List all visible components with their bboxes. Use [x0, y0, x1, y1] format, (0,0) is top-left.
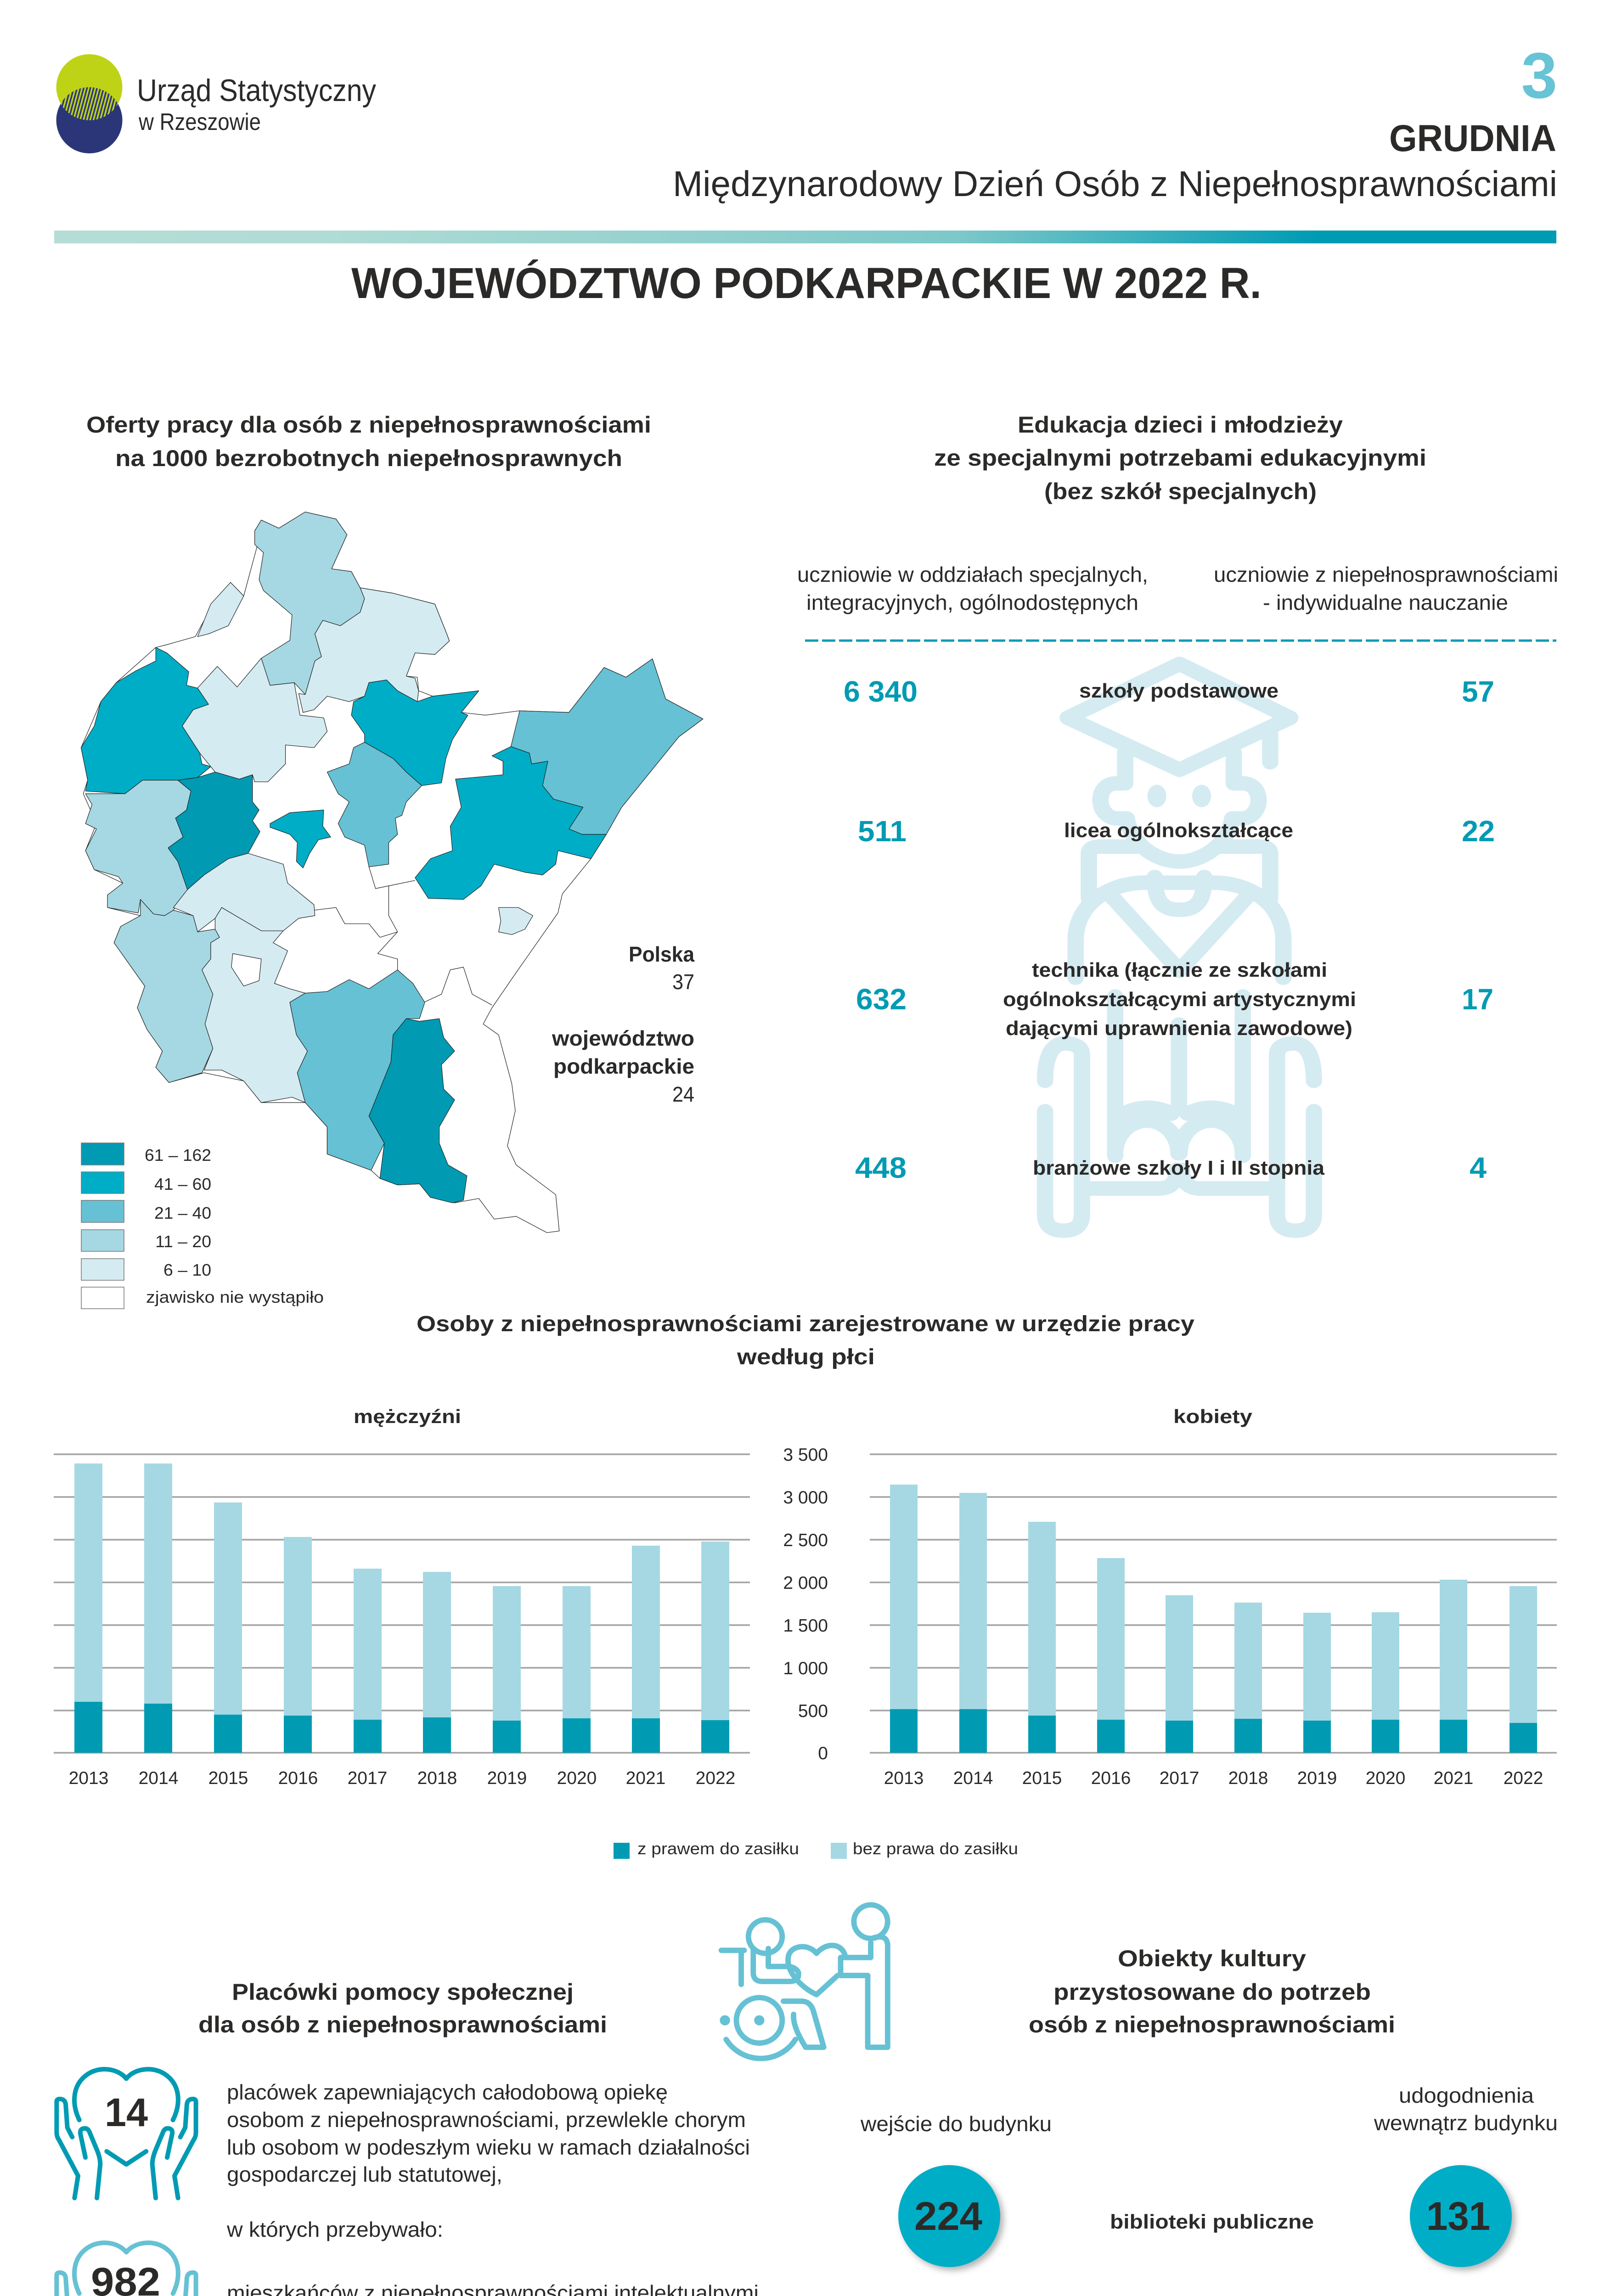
row: biblioteki	[898, 2165, 1512, 2267]
bar chart: men: 2016	[278, 1768, 318, 1788]
column headers: integracyjnych, ogólnodostępnych	[806, 591, 1138, 614]
heading: social care	[198, 1979, 607, 2037]
shared value axis: 2 000	[783, 1573, 828, 1593]
panel: education	[797, 412, 1558, 1231]
chart legend	[614, 1839, 1018, 1859]
row: biblioteki: biblioteki publiczne	[1110, 2211, 1314, 2233]
bar chart: women: 2017	[1160, 1768, 1199, 1788]
bar chart: men: 2021	[626, 1768, 665, 1788]
bar chart: women	[870, 1454, 1557, 1788]
bar chart: men: 2022	[696, 1768, 735, 1788]
panel: cultural facilities	[860, 1946, 1558, 2296]
row: technika	[856, 959, 1493, 1040]
row: licea: licea ogólnokształcące	[1064, 819, 1293, 842]
bar chart: women: 2019	[1297, 1768, 1337, 1788]
row: licea	[858, 815, 1495, 848]
bar chart: men: 2020	[557, 1768, 597, 1788]
icon: hands and heart 14	[56, 2069, 196, 2198]
map legend: 61 – 162	[145, 1146, 211, 1165]
bar chart: women: 2015	[1022, 1768, 1062, 1788]
panel: social care	[56, 1979, 759, 2296]
bar chart: men: 2013	[69, 1768, 108, 1788]
row: technika: dającymi uprawnienia zawodowe)	[1006, 1017, 1352, 1040]
text: facilities: osobom z niepełnosprawnościami, przewlekle chorym	[227, 2108, 746, 2132]
heading: charts: Osoby z niepełnosprawnościami zarejestrowane w urzędzie pracy	[417, 1312, 1194, 1336]
logo: Urząd Statystyczny w Rzeszowie: w Rzeszowie	[138, 109, 261, 135]
logo: Urząd Statystyczny w Rzeszowie: Urząd Statystyczny	[137, 73, 376, 108]
gradient bar	[54, 231, 1556, 243]
map legend: 41 – 60	[154, 1175, 211, 1193]
icon: graduate in wheelchair	[1045, 664, 1314, 1231]
comparison values: Polska	[629, 942, 694, 966]
map legend	[81, 1143, 324, 1309]
comparison values	[552, 942, 694, 1106]
comparison values: podkarpackie	[553, 1054, 694, 1078]
row: szkoły podstawowe: szkoły podstawowe	[1079, 680, 1279, 702]
heading: culture	[1029, 1946, 1395, 2037]
column header: inside: udogodnienia	[1399, 2083, 1534, 2107]
bar chart: women: 2022	[1504, 1768, 1543, 1788]
row: szkoły podstawowe: 57	[1462, 675, 1494, 708]
row: branżowe	[855, 1151, 1487, 1184]
heading: social care: Placówki pomocy społecznej	[232, 1979, 574, 2005]
occasion title: Międzynarodowy Dzień Osób z Niepełnosprawnościami	[673, 163, 1557, 204]
row: szkoły podstawowe	[844, 675, 1494, 708]
logo: Urząd Statystyczny w Rzeszowie	[56, 54, 376, 153]
heading: job offers	[86, 412, 651, 471]
map legend: zjawisko nie wystąpiło	[146, 1288, 324, 1306]
row: licea: 511	[858, 815, 907, 848]
chart legend: bez prawa do zasiłku	[853, 1839, 1018, 1858]
chart title: men: mężczyźni	[354, 1406, 461, 1427]
shared value axis: 3 000	[783, 1488, 828, 1508]
column header: inside: wewnątrz budynku	[1374, 2111, 1558, 2135]
row: biblioteki: 224	[914, 2194, 982, 2239]
bar chart: women: 2016	[1091, 1768, 1131, 1788]
heading: charts	[417, 1312, 1194, 1369]
bar chart: women: 2021	[1434, 1768, 1473, 1788]
column headers	[797, 563, 1558, 614]
row: branżowe: 448	[855, 1151, 907, 1184]
bar chart: men	[54, 1454, 750, 1788]
heading: education: Edukacja dzieci i młodzieży	[1018, 412, 1343, 438]
heading: culture: osób z niepełnosprawnościami	[1029, 2012, 1395, 2037]
row: technika: ogólnokształcącymi artystycznymi	[1003, 988, 1356, 1011]
shared value axis	[783, 1445, 828, 1763]
bar chart: women: 2014	[953, 1768, 993, 1788]
row: technika: technika (łącznie ze szkołami	[1032, 959, 1327, 981]
map legend: 6 – 10	[163, 1261, 211, 1279]
bar chart: women: 2013	[884, 1768, 924, 1788]
column headers: uczniowie z niepełnosprawnościami	[1214, 563, 1558, 586]
date month: GRUDNIA	[1389, 118, 1556, 159]
heading: social care: dla osób z niepełnosprawnościami	[198, 2012, 607, 2037]
column header: inside	[1374, 2083, 1558, 2135]
header	[56, 39, 1557, 204]
text: facilities: gospodarczej lub statutowej,	[227, 2162, 502, 2186]
column header: entrance: wejście do budynku	[860, 2112, 1052, 2136]
main title: WOJEWÓDZTWO PODKARPACKIE W 2022 R.	[351, 259, 1262, 308]
row: branżowe: 4	[1470, 1151, 1487, 1184]
heading: culture: Obiekty kultury	[1118, 1946, 1306, 1971]
heading: education: ze specjalnymi potrzebami edukacyjnymi	[934, 445, 1426, 471]
bar chart: men: 2018	[417, 1768, 457, 1788]
text: facilities	[226, 2080, 750, 2241]
map legend: 21 – 40	[154, 1204, 211, 1222]
row: branżowe: branżowe szkoły I i II stopnia	[1033, 1157, 1325, 1179]
comparison values: 37	[672, 970, 694, 994]
map legend: 11 – 20	[155, 1232, 211, 1251]
shared value axis: 500	[798, 1701, 828, 1721]
comparison values: województwo	[552, 1026, 694, 1050]
shared value axis: 1 500	[783, 1616, 828, 1636]
heading: education: (bez szkół specjalnych)	[1044, 478, 1317, 504]
bar chart: men: 2015	[208, 1768, 248, 1788]
text: facilities: lub osobom w podeszłym wieku w ramach działalności	[227, 2135, 750, 2159]
shared value axis: 0	[818, 1744, 828, 1763]
row: szkoły podstawowe: 6 340	[844, 675, 918, 708]
icon: hands and heart 14: 14	[105, 2090, 148, 2135]
column headers: uczniowie w oddziałach specjalnych,	[797, 563, 1148, 586]
bar chart: men: 2017	[348, 1768, 387, 1788]
row: technika: 632	[856, 983, 907, 1016]
chart legend: z prawem do zasiłku	[637, 1839, 799, 1858]
heading: charts: według płci	[737, 1345, 875, 1369]
heading: job offers: Oferty pracy dla osób z niepełnosprawnościami	[86, 412, 651, 438]
bar chart: men: 2014	[139, 1768, 178, 1788]
text: facilities: w których przebywało:	[226, 2217, 443, 2241]
shared value axis: 3 500	[783, 1445, 828, 1465]
column headers: - indywidualne nauczanie	[1263, 591, 1508, 614]
heading: culture: przystosowane do potrzeb	[1053, 1979, 1371, 2005]
shared value axis: 2 500	[783, 1531, 828, 1550]
text: facilities: placówek zapewniających całodobową opiekę	[227, 2080, 668, 2104]
row: technika: 17	[1462, 983, 1493, 1016]
panel: job offers map	[81, 412, 703, 1309]
bar chart: women: 2020	[1366, 1768, 1405, 1788]
comparison values: 24	[672, 1082, 694, 1106]
heading: education	[934, 412, 1426, 504]
bar chart: men: 2019	[487, 1768, 527, 1788]
panel: registered persons charts	[54, 1312, 1557, 1859]
heading: job offers: na 1000 bezrobotnych niepełnosprawnych	[115, 445, 622, 471]
bar chart: women: 2018	[1228, 1768, 1268, 1788]
date number 3: 3	[1521, 39, 1557, 112]
choropleth map of counties	[81, 512, 703, 1232]
icon: person in wheelchair receiving heart	[721, 1905, 888, 2059]
row: biblioteki: 131	[1426, 2194, 1490, 2239]
row: licea: 22	[1462, 815, 1495, 848]
icon: hands and heart 982	[56, 2243, 196, 2296]
chart title: women: kobiety	[1173, 1406, 1253, 1427]
shared value axis: 1 000	[783, 1659, 828, 1678]
